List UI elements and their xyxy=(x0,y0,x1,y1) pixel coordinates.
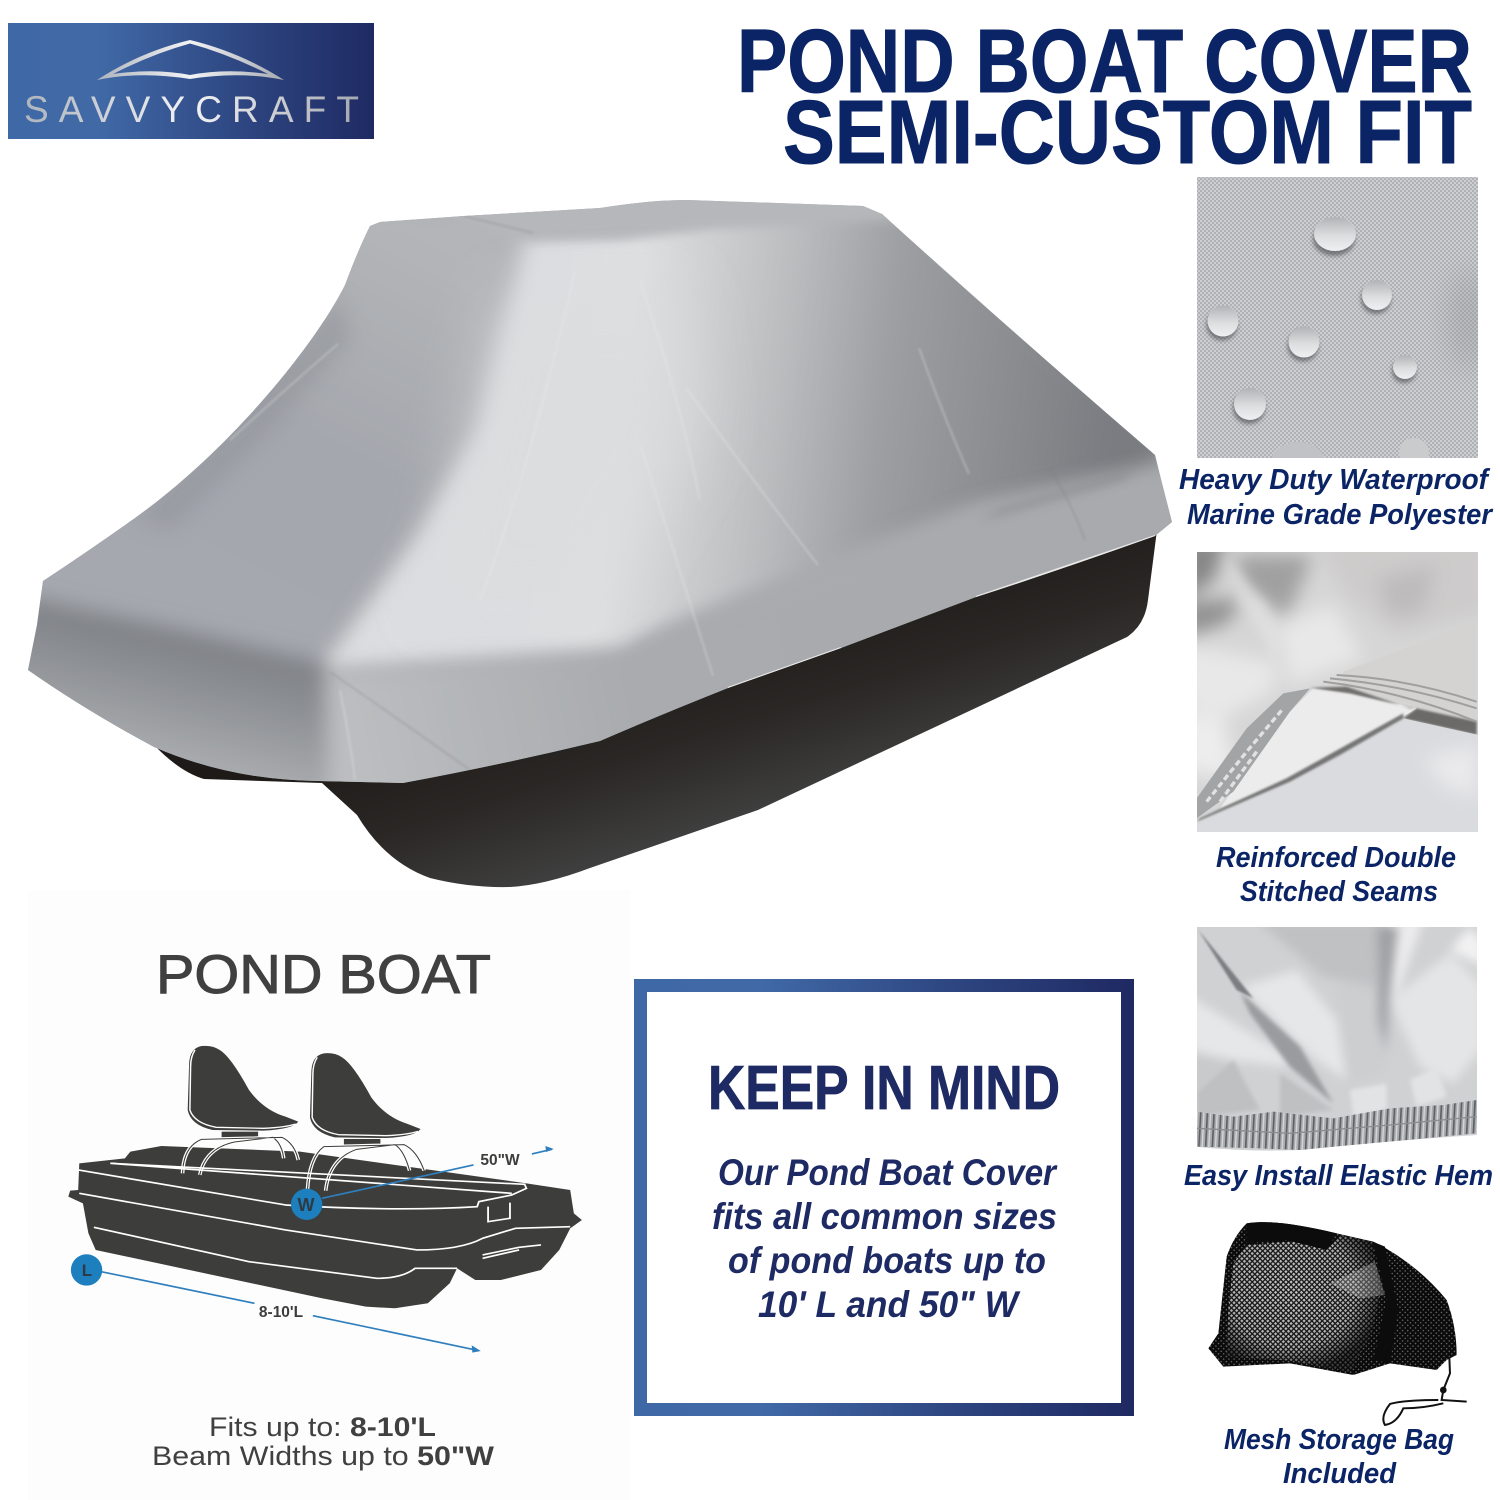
seats xyxy=(183,1046,298,1175)
cover shading xyxy=(459,200,889,244)
photo: waterproof fabric with droplets xyxy=(1197,177,1478,458)
caption: polyester xyxy=(1179,464,1494,531)
dimension labels: 50"W xyxy=(480,1152,520,1169)
photo: mesh storage bag xyxy=(1208,1222,1467,1425)
caption: mesh bag: Included xyxy=(1283,1458,1397,1490)
dimension labels xyxy=(82,1152,520,1321)
caption: mesh bag xyxy=(1224,1424,1454,1490)
callout heading: KEEP IN MIND xyxy=(708,1054,1060,1123)
logo: Savvycraft xyxy=(8,23,374,139)
gray cover xyxy=(28,200,1172,783)
caption: polyester: Heavy Duty Waterproof xyxy=(1179,464,1491,496)
dimension labels: L xyxy=(82,1261,92,1280)
dimension labels: 8-10'L xyxy=(259,1304,303,1321)
dimension L line xyxy=(101,1272,479,1351)
photo: elastic hem xyxy=(1190,920,1483,1157)
hero photo: covered pond boat xyxy=(0,185,1200,887)
logo wordmark: SAVVYCRAFT xyxy=(24,89,359,130)
dimension labels: W xyxy=(298,1195,314,1215)
water droplets xyxy=(1206,217,1429,482)
callout body xyxy=(712,1152,1058,1325)
photo: reinforced seams xyxy=(1197,552,1478,832)
panel: pond boat diagram xyxy=(28,890,630,1500)
fit text xyxy=(152,1412,495,1471)
callout body: Our Pond Boat Cover xyxy=(718,1152,1058,1193)
hem edge xyxy=(728,536,1155,688)
fit text: Beam Widths up to 50"W xyxy=(152,1441,495,1471)
title xyxy=(737,12,1472,183)
fit text: Fits up to: 8-10'L xyxy=(209,1412,436,1442)
dimension W line xyxy=(322,1149,552,1198)
callout body: of pond boats up to xyxy=(728,1240,1046,1281)
callout body: fits all common sizes xyxy=(712,1196,1057,1237)
caption: seams: Stitched Seams xyxy=(1240,876,1438,908)
callout body: 10' L and 50" W xyxy=(758,1284,1021,1325)
boat line illustration xyxy=(68,1046,582,1353)
caption: mesh bag: Mesh Storage Bag xyxy=(1224,1424,1454,1456)
heading: pond boat: POND BOAT xyxy=(156,943,491,1005)
icon: logo roof arc xyxy=(97,40,284,80)
caption: seams xyxy=(1216,842,1456,908)
callout: keep in mind xyxy=(640,986,1128,1410)
cover fold lines xyxy=(230,344,970,778)
caption: seams: Reinforced Double xyxy=(1216,842,1456,874)
boat hull xyxy=(154,530,1157,887)
